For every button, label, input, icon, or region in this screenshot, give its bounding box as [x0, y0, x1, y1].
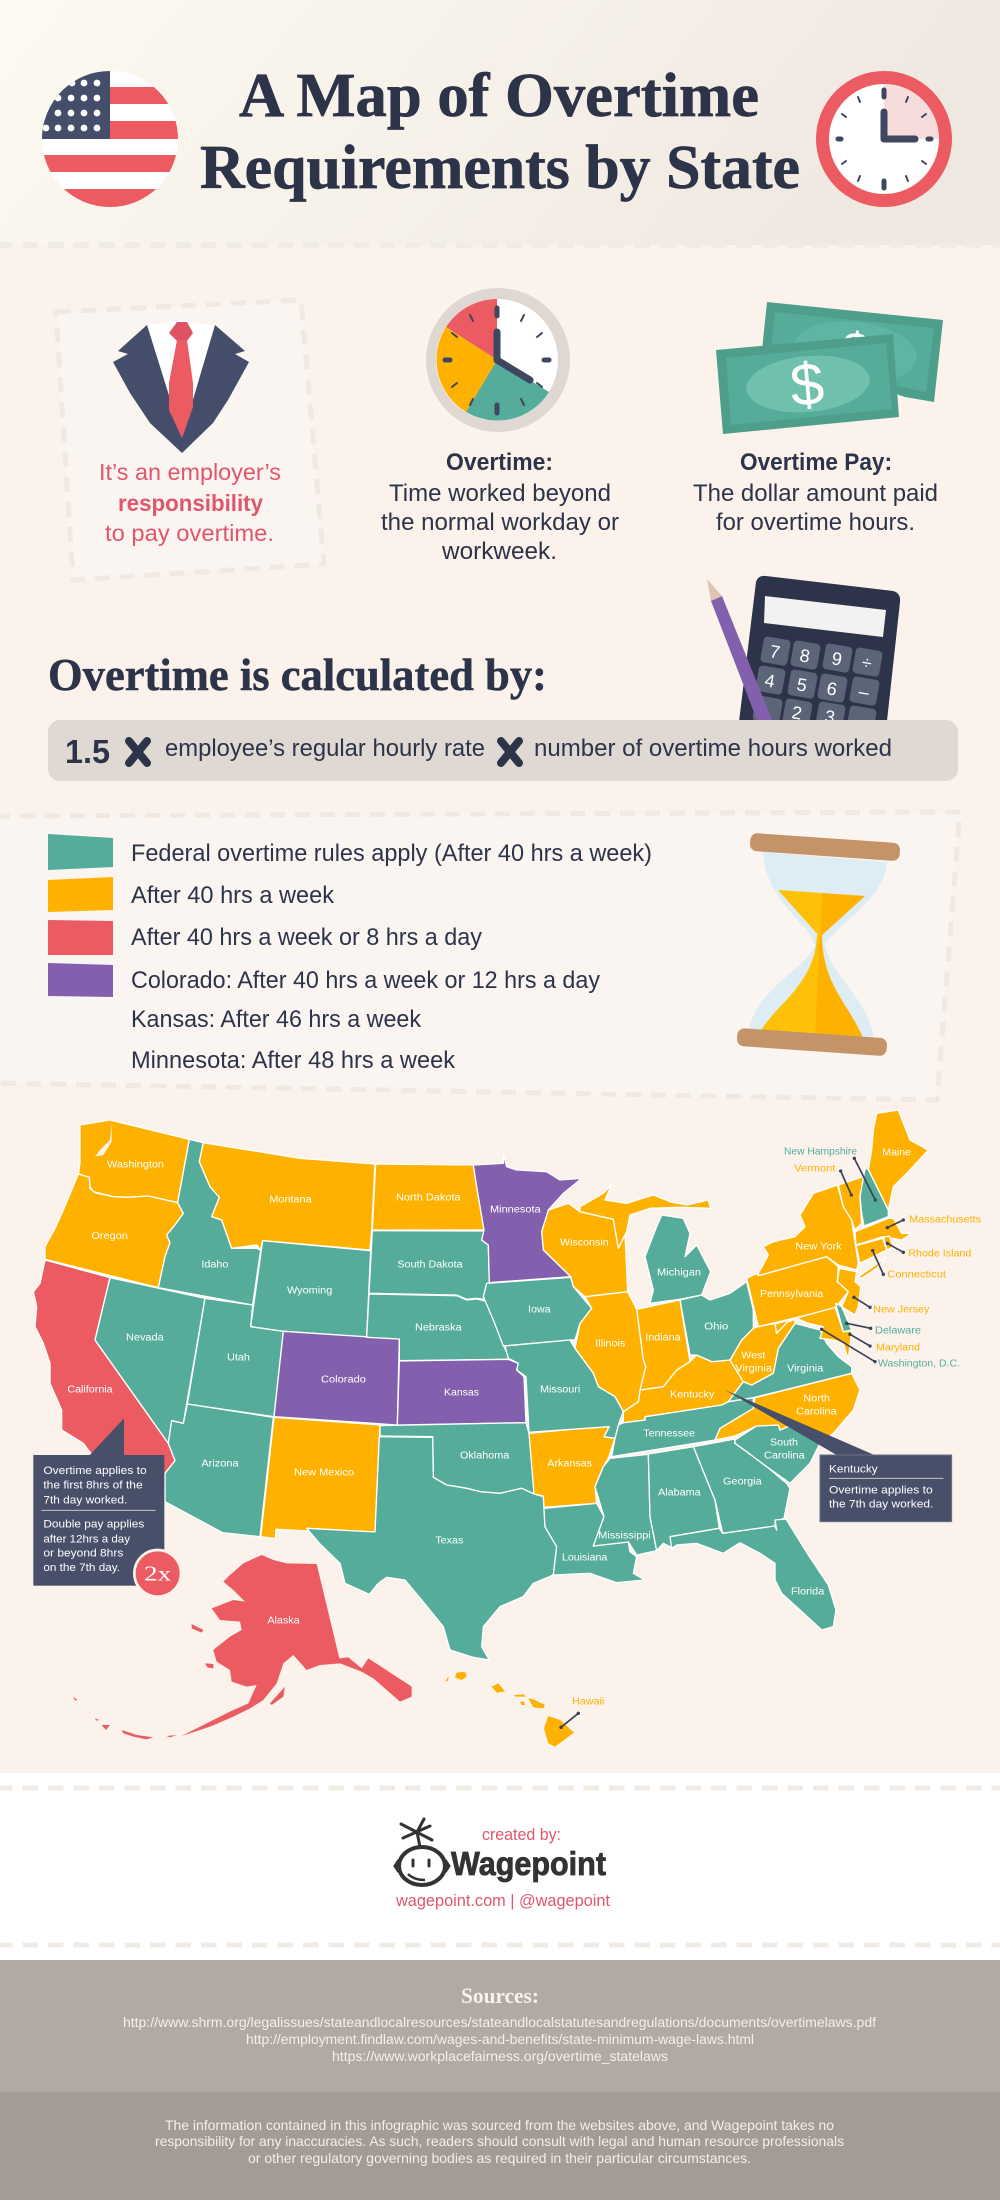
disclaimer band: or other regulatory governing bodies as required in their particular circumstances.: [248, 2150, 751, 2166]
state: Georgia: [693, 1439, 790, 1533]
responsibility text: responsibility: [118, 490, 263, 516]
state labels: Indiana: [645, 1333, 681, 1344]
state labels: Colorado: [321, 1375, 366, 1386]
state: New Mexico: [261, 1417, 380, 1539]
sources band: [0, 1960, 1000, 2092]
text: overtime definition: Overtime:: [446, 449, 553, 476]
state labels: Carolina: [764, 1451, 805, 1462]
state: Kentucky: [623, 1355, 743, 1423]
icon: calculator and pencil: 7: [768, 641, 781, 663]
state labels: Maine: [882, 1148, 911, 1159]
state: Alabama: [648, 1447, 719, 1551]
map: united states overtime rules: [33, 1110, 981, 1747]
state: Arkansas: [529, 1426, 615, 1507]
callout: california: [33, 1418, 181, 1597]
legend text: [131, 840, 652, 1074]
state: New Jersey: [837, 1268, 861, 1315]
state: Virginia: [728, 1323, 852, 1402]
legend text: Colorado: After 40 hrs a week or 12 hrs a day: [131, 967, 600, 994]
state labels: Ohio: [704, 1322, 729, 1333]
state: Tennessee: [612, 1398, 753, 1457]
state: Massachusetts: [855, 1218, 912, 1245]
state labels: Georgia: [723, 1477, 762, 1488]
text: overtime definition: workweek.: [441, 538, 557, 565]
badge: 2x: [134, 1550, 181, 1597]
website and handle: wagepoint.com | @wagepoint: [395, 1891, 610, 1910]
icon: calculator and pencil: ÷: [860, 652, 874, 674]
state labels: Hawaii: [572, 1697, 604, 1708]
state: North Dakota: [372, 1164, 484, 1230]
callout: kentucky: Kentucky: [829, 1463, 878, 1475]
sources band: Sources:: [461, 1983, 539, 2008]
icon: calculator and pencil: 4: [763, 670, 776, 692]
text: overtime pay definition: [693, 449, 938, 536]
text: overtime pay definition: The dollar amount paid: [693, 480, 938, 507]
state: California: [33, 1260, 175, 1487]
state labels: Massachusetts: [909, 1215, 981, 1226]
state: Indiana: [637, 1300, 690, 1390]
state: Oklahoma: [380, 1423, 534, 1494]
title: A Map of Overtime: [239, 62, 759, 130]
state: Michigan upper peninsula: [580, 1185, 711, 1248]
pointer lines: [559, 1157, 905, 1729]
state: Illinois: [575, 1292, 646, 1412]
state labels: [67, 1147, 981, 1708]
state: Nevada: [95, 1278, 205, 1443]
state labels: Washington: [107, 1160, 164, 1171]
state: Oregon: [45, 1174, 183, 1288]
header band: [0, 0, 1000, 245]
state: Ohio: [680, 1282, 753, 1362]
state labels: New Jersey: [873, 1305, 929, 1316]
state labels: Florida: [791, 1587, 825, 1598]
panel: employer responsibility: [56, 300, 324, 580]
state labels: Connecticut: [887, 1270, 946, 1281]
icon: calculator and pencil: [707, 576, 900, 735]
formula bar: [48, 720, 958, 781]
badge: 2x: 2x: [144, 1564, 172, 1586]
state labels: Oregon: [91, 1231, 128, 1242]
icon: money bills: [716, 302, 943, 434]
state labels: Arkansas: [547, 1459, 592, 1470]
state labels: Nevada: [126, 1333, 164, 1344]
callout: california: the first 8hrs of the: [43, 1479, 143, 1491]
state labels: Montana: [269, 1195, 312, 1206]
state labels: Kansas: [444, 1388, 479, 1399]
state: South Carolina: [735, 1425, 820, 1483]
puget sound: [95, 1123, 112, 1157]
callout: california: Double pay applies: [43, 1518, 145, 1530]
state: Mississippi: [593, 1454, 657, 1555]
state labels: Nebraska: [415, 1323, 462, 1334]
state: West Virginia: [730, 1318, 795, 1385]
icon: calculator and pencil: –: [857, 681, 870, 703]
callout: kentucky: Overtime applies to: [829, 1484, 933, 1496]
callout: california: Overtime applies to: [43, 1465, 147, 1477]
state labels: Texas: [435, 1536, 463, 1547]
state labels: Tennessee: [643, 1429, 695, 1440]
state labels: Idaho: [201, 1260, 229, 1271]
state labels: New Mexico: [294, 1468, 354, 1479]
callout: california: or beyond 8hrs: [43, 1547, 124, 1559]
state labels: Pennsylvania: [760, 1289, 824, 1300]
title: Requirements by State: [200, 134, 800, 202]
state: Arizona: [165, 1404, 273, 1537]
state: Washington: [78, 1120, 189, 1203]
state labels: Alaska: [267, 1616, 300, 1627]
text: overtime pay definition: Overtime Pay:: [740, 449, 892, 476]
created by: created by:: [482, 1825, 561, 1844]
state: Utah: [187, 1298, 283, 1417]
state labels: Virginia: [735, 1364, 772, 1375]
state: Montana: [199, 1143, 375, 1250]
heading: overtime is calculated by: Overtime is calculated by:: [48, 650, 547, 700]
state labels: Alabama: [658, 1488, 701, 1499]
callout: california: on the 7th day.: [43, 1562, 120, 1574]
disclaimer band: [0, 2092, 1000, 2200]
text: overtime pay definition: for overtime hours.: [716, 509, 915, 536]
responsibility text: It’s an employer’s: [99, 459, 281, 485]
legend swatch: after 40: [48, 877, 113, 912]
state labels: Wisconsin: [560, 1238, 609, 1249]
callout: california: after 12hrs a day: [43, 1533, 131, 1545]
icon: calculator and pencil: 8: [798, 645, 811, 667]
state labels: South: [770, 1438, 798, 1449]
state: Vermont: [838, 1176, 865, 1230]
state labels: Wyoming: [287, 1286, 332, 1297]
state: Hawaii: [445, 1672, 574, 1747]
states: [33, 1110, 928, 1660]
icon: money bills: $: [787, 350, 827, 419]
footer credit band: [0, 1773, 1000, 1960]
legend swatch: federal: [48, 834, 113, 870]
state: Wyoming: [251, 1241, 371, 1337]
state: Maryland: [775, 1307, 852, 1360]
responsibility text: to pay overtime.: [105, 520, 274, 546]
state: New York: [758, 1185, 858, 1276]
icon: calculator and pencil: 2: [790, 702, 803, 724]
state labels: New Hampshire: [784, 1147, 857, 1158]
disclaimer band: The information contained in this infographic was sourced from the websites above, and Wagepoint takes no: [165, 2117, 834, 2133]
legend swatch: after 40 or 8: [48, 920, 113, 955]
state: Louisiana: [544, 1503, 645, 1583]
state labels: Maryland: [876, 1343, 920, 1354]
state labels: New York: [795, 1242, 842, 1253]
icon: calculator and pencil: 6: [825, 678, 838, 700]
callout: california: 7th day worked.: [43, 1494, 127, 1506]
state labels: Washington, D.C.: [878, 1359, 960, 1370]
title: [200, 62, 800, 202]
state: Pennsylvania: [747, 1257, 848, 1327]
callout: kentucky: the 7th day worked.: [829, 1498, 933, 1510]
state: Missouri: [505, 1340, 623, 1438]
state: Kansas: [397, 1359, 526, 1425]
state: Idaho: [158, 1139, 261, 1305]
callout: kentucky: [725, 1390, 952, 1522]
state labels: Rhode Island: [908, 1249, 971, 1260]
icon: calculator and pencil: 3: [823, 706, 836, 728]
state labels: Mississippi: [598, 1531, 651, 1542]
state labels: Arizona: [201, 1459, 239, 1470]
state: Nebraska: [367, 1294, 510, 1361]
legend text: After 40 hrs a week: [131, 882, 335, 909]
disclaimer band: responsibility for any inaccuracies. As such, readers should consult with legal and human resource professionals: [155, 2133, 844, 2149]
state labels: Minnesota: [490, 1205, 541, 1216]
icon: american flag: [42, 71, 178, 207]
state labels: Michigan: [657, 1268, 701, 1279]
state labels: Delaware: [875, 1326, 921, 1337]
icon: wall clock: [816, 71, 952, 207]
legend text: Federal overtime rules apply (After 40 hrs a week): [131, 840, 652, 867]
state labels: Iowa: [528, 1305, 551, 1316]
state: Florida: [670, 1519, 836, 1630]
state: Maine: [868, 1110, 928, 1210]
formula bar: employee’s regular hourly rate: [165, 735, 485, 762]
state labels: Missouri: [540, 1385, 580, 1396]
text: overtime definition: Time worked beyond: [389, 480, 611, 507]
state labels: Illinois: [595, 1339, 625, 1350]
legend text: Kansas: After 46 hrs a week: [131, 1006, 422, 1033]
formula bar: 1.5: [65, 733, 110, 770]
state labels: North Dakota: [396, 1193, 461, 1204]
text: overtime definition: the normal workday or: [381, 509, 619, 536]
state: Minnesota: [473, 1155, 582, 1283]
state labels: North: [803, 1394, 830, 1405]
state: Alaska: [73, 1555, 412, 1739]
state labels: Kentucky: [670, 1390, 714, 1401]
state labels: Oklahoma: [460, 1451, 510, 1462]
state: Michigan: [645, 1215, 711, 1303]
state labels: Utah: [227, 1353, 250, 1364]
icon: calculator and pencil: 5: [795, 674, 808, 696]
sources band: https://www.workplacefairness.org/overtime_statelaws: [332, 2049, 668, 2064]
state labels: Louisiana: [562, 1553, 608, 1564]
legend text: After 40 hrs a week or 8 hrs a day: [131, 924, 482, 951]
panel: legend: [0, 812, 960, 1100]
state: Iowa: [483, 1277, 592, 1346]
state: North Carolina: [715, 1373, 860, 1443]
state: Texas: [307, 1437, 557, 1660]
icon: money bills: $: [839, 323, 871, 378]
state: Colorado: [274, 1331, 399, 1425]
responsibility text: [99, 459, 281, 546]
state: Connecticut: [856, 1238, 887, 1263]
state: South Dakota: [369, 1231, 490, 1300]
state: Long Island: [858, 1257, 887, 1278]
state labels: Virginia: [787, 1364, 824, 1375]
state: New Hampshire: [860, 1168, 888, 1226]
state labels: Carolina: [796, 1407, 837, 1418]
icon: hourglass: [737, 833, 900, 1056]
icon: suit and tie: [113, 321, 249, 453]
state labels: West: [741, 1351, 766, 1362]
icon: calculator and pencil: 9: [830, 648, 843, 670]
state labels: South Dakota: [397, 1260, 463, 1271]
formula bar: number of overtime hours worked: [534, 735, 892, 762]
sources band: http://www.shrm.org/legalissues/stateandlocalresources/stateandlocalstatutesandregulations/documents/overtimelaws.pdf: [123, 2015, 876, 2030]
legend text: Minnesota: After 48 hrs a week: [131, 1047, 456, 1074]
state: Rhode Island: [883, 1236, 893, 1250]
sources band: http://employment.findlaw.com/wages-and-benefits/state-minimum-wage-laws.html: [246, 2032, 754, 2047]
icon: overtime clock: [426, 288, 570, 432]
state: Delaware: [836, 1303, 852, 1332]
state labels: California: [67, 1385, 113, 1396]
state labels: Vermont: [794, 1164, 836, 1175]
state: Wisconsin: [542, 1203, 628, 1297]
logo: wagepoint: Wagepoint: [451, 1845, 606, 1882]
text: overtime definition: [381, 449, 619, 565]
logo: wagepoint: [395, 1819, 606, 1885]
legend swatch: colorado kansas minnesota: [48, 963, 113, 997]
